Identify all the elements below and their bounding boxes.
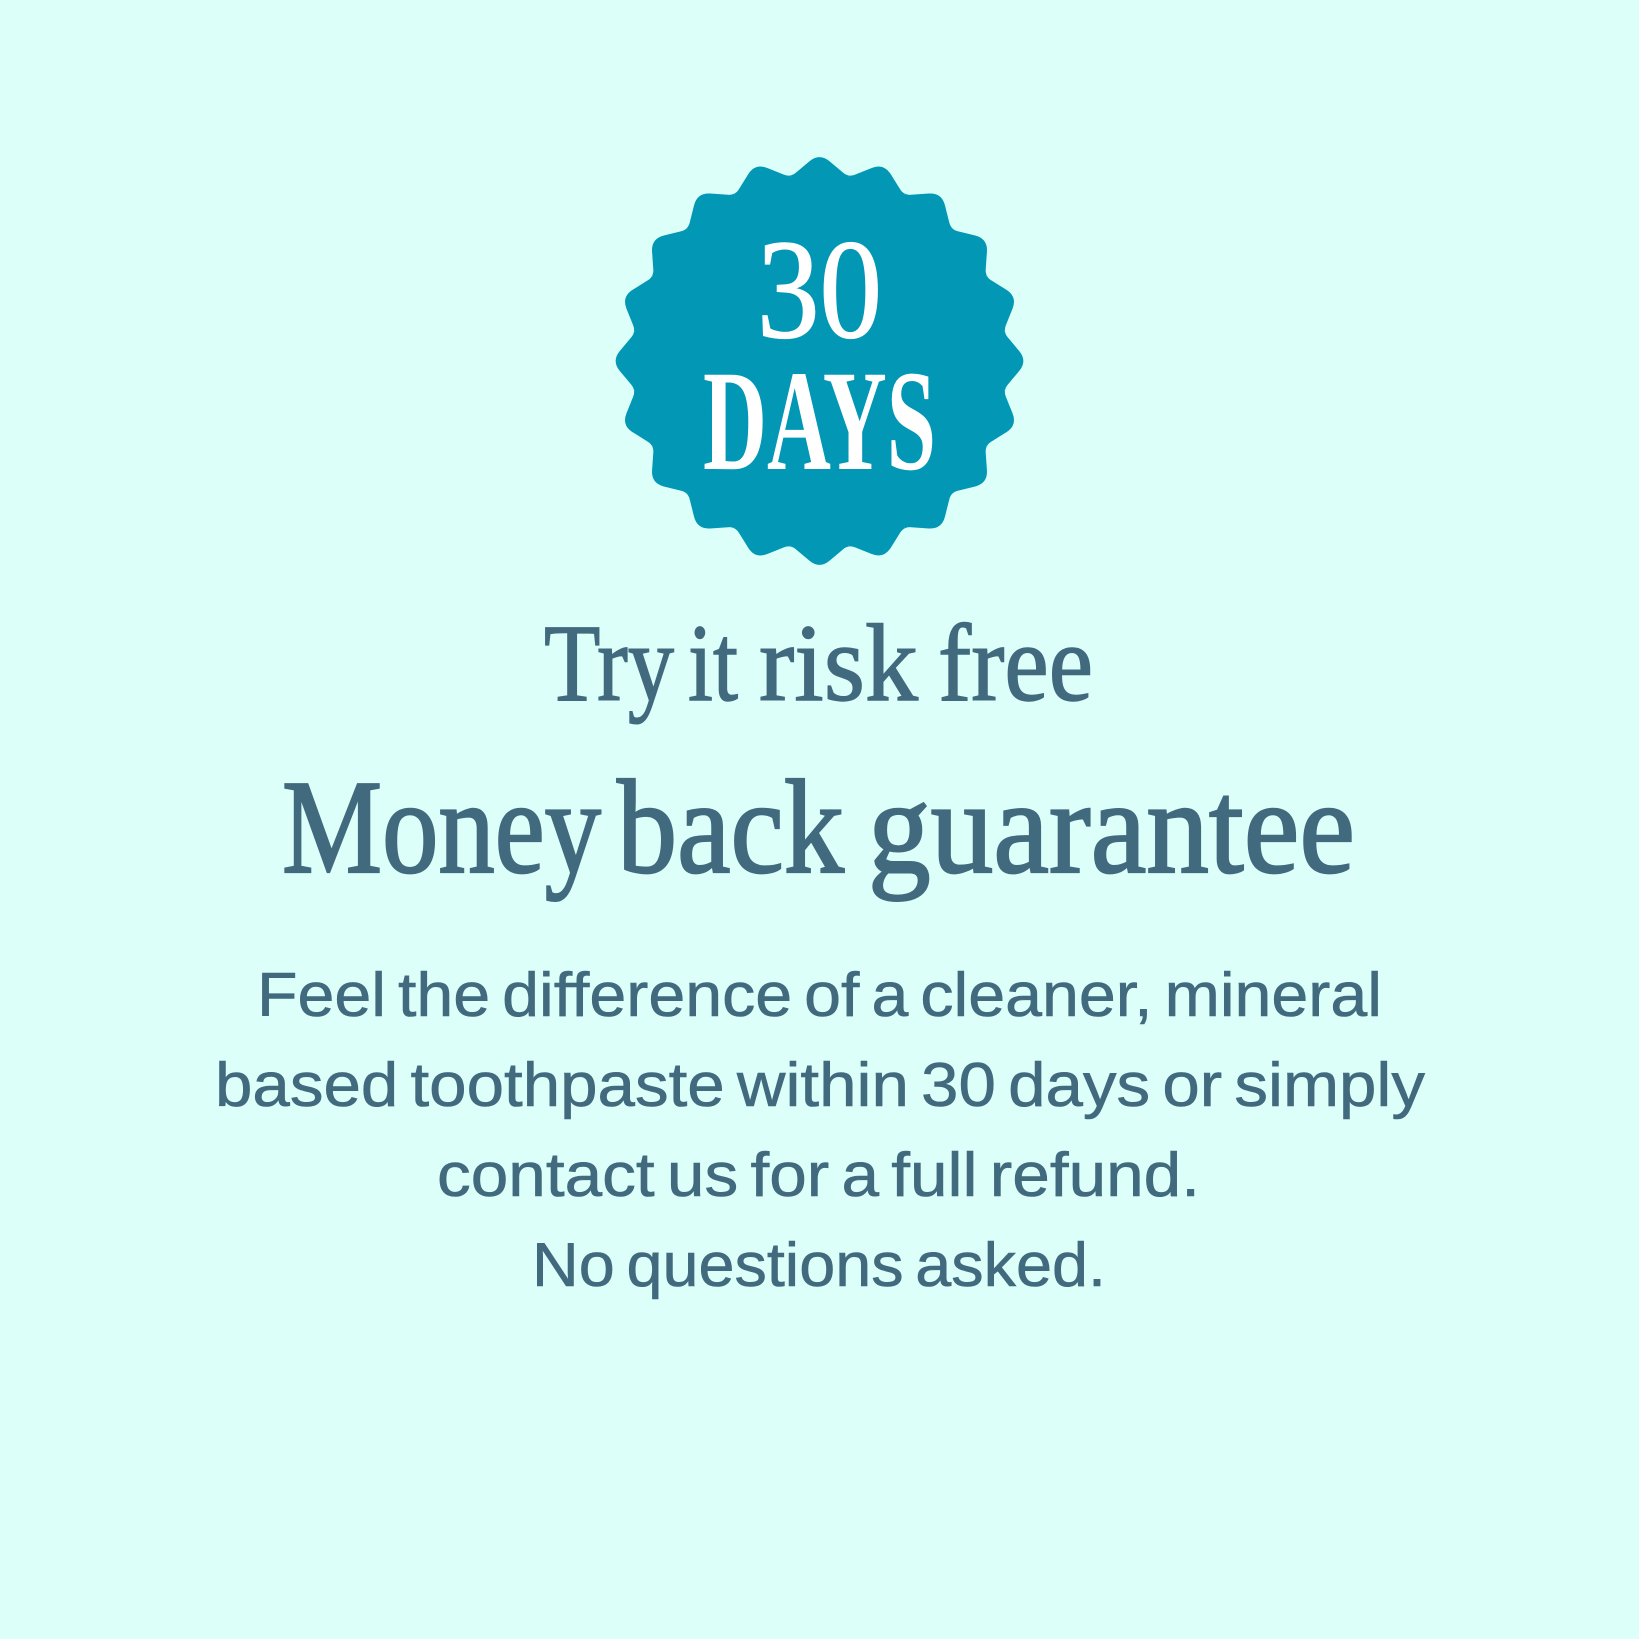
heading: try it risk free: free (938, 602, 1093, 724)
body text: No questions asked. (532, 1231, 1106, 1300)
heading: money back guarantee: Money (282, 753, 601, 901)
body text (215, 961, 1425, 1300)
body text: contact us for a full refund. (437, 1141, 1200, 1210)
badge label: DAYS (703, 342, 936, 501)
heading: try it risk free: Try (544, 602, 674, 724)
heading: money back guarantee (282, 753, 1355, 901)
body text: based toothpaste within 30 days or simply (215, 1051, 1425, 1120)
heading: money back guarantee: back (617, 753, 844, 901)
body text: Feel the difference of a cleaner, mineral (257, 961, 1382, 1030)
heading: try it risk free: risk (759, 602, 918, 724)
badge: 30 days seal (616, 157, 1023, 565)
icon: scalloped seal shape (616, 157, 1023, 565)
heading: money back guarantee: guarantee (868, 753, 1355, 901)
badge number: 30 (757, 210, 882, 368)
heading: try it risk free (544, 602, 1093, 724)
heading: try it risk free: it (688, 602, 738, 724)
